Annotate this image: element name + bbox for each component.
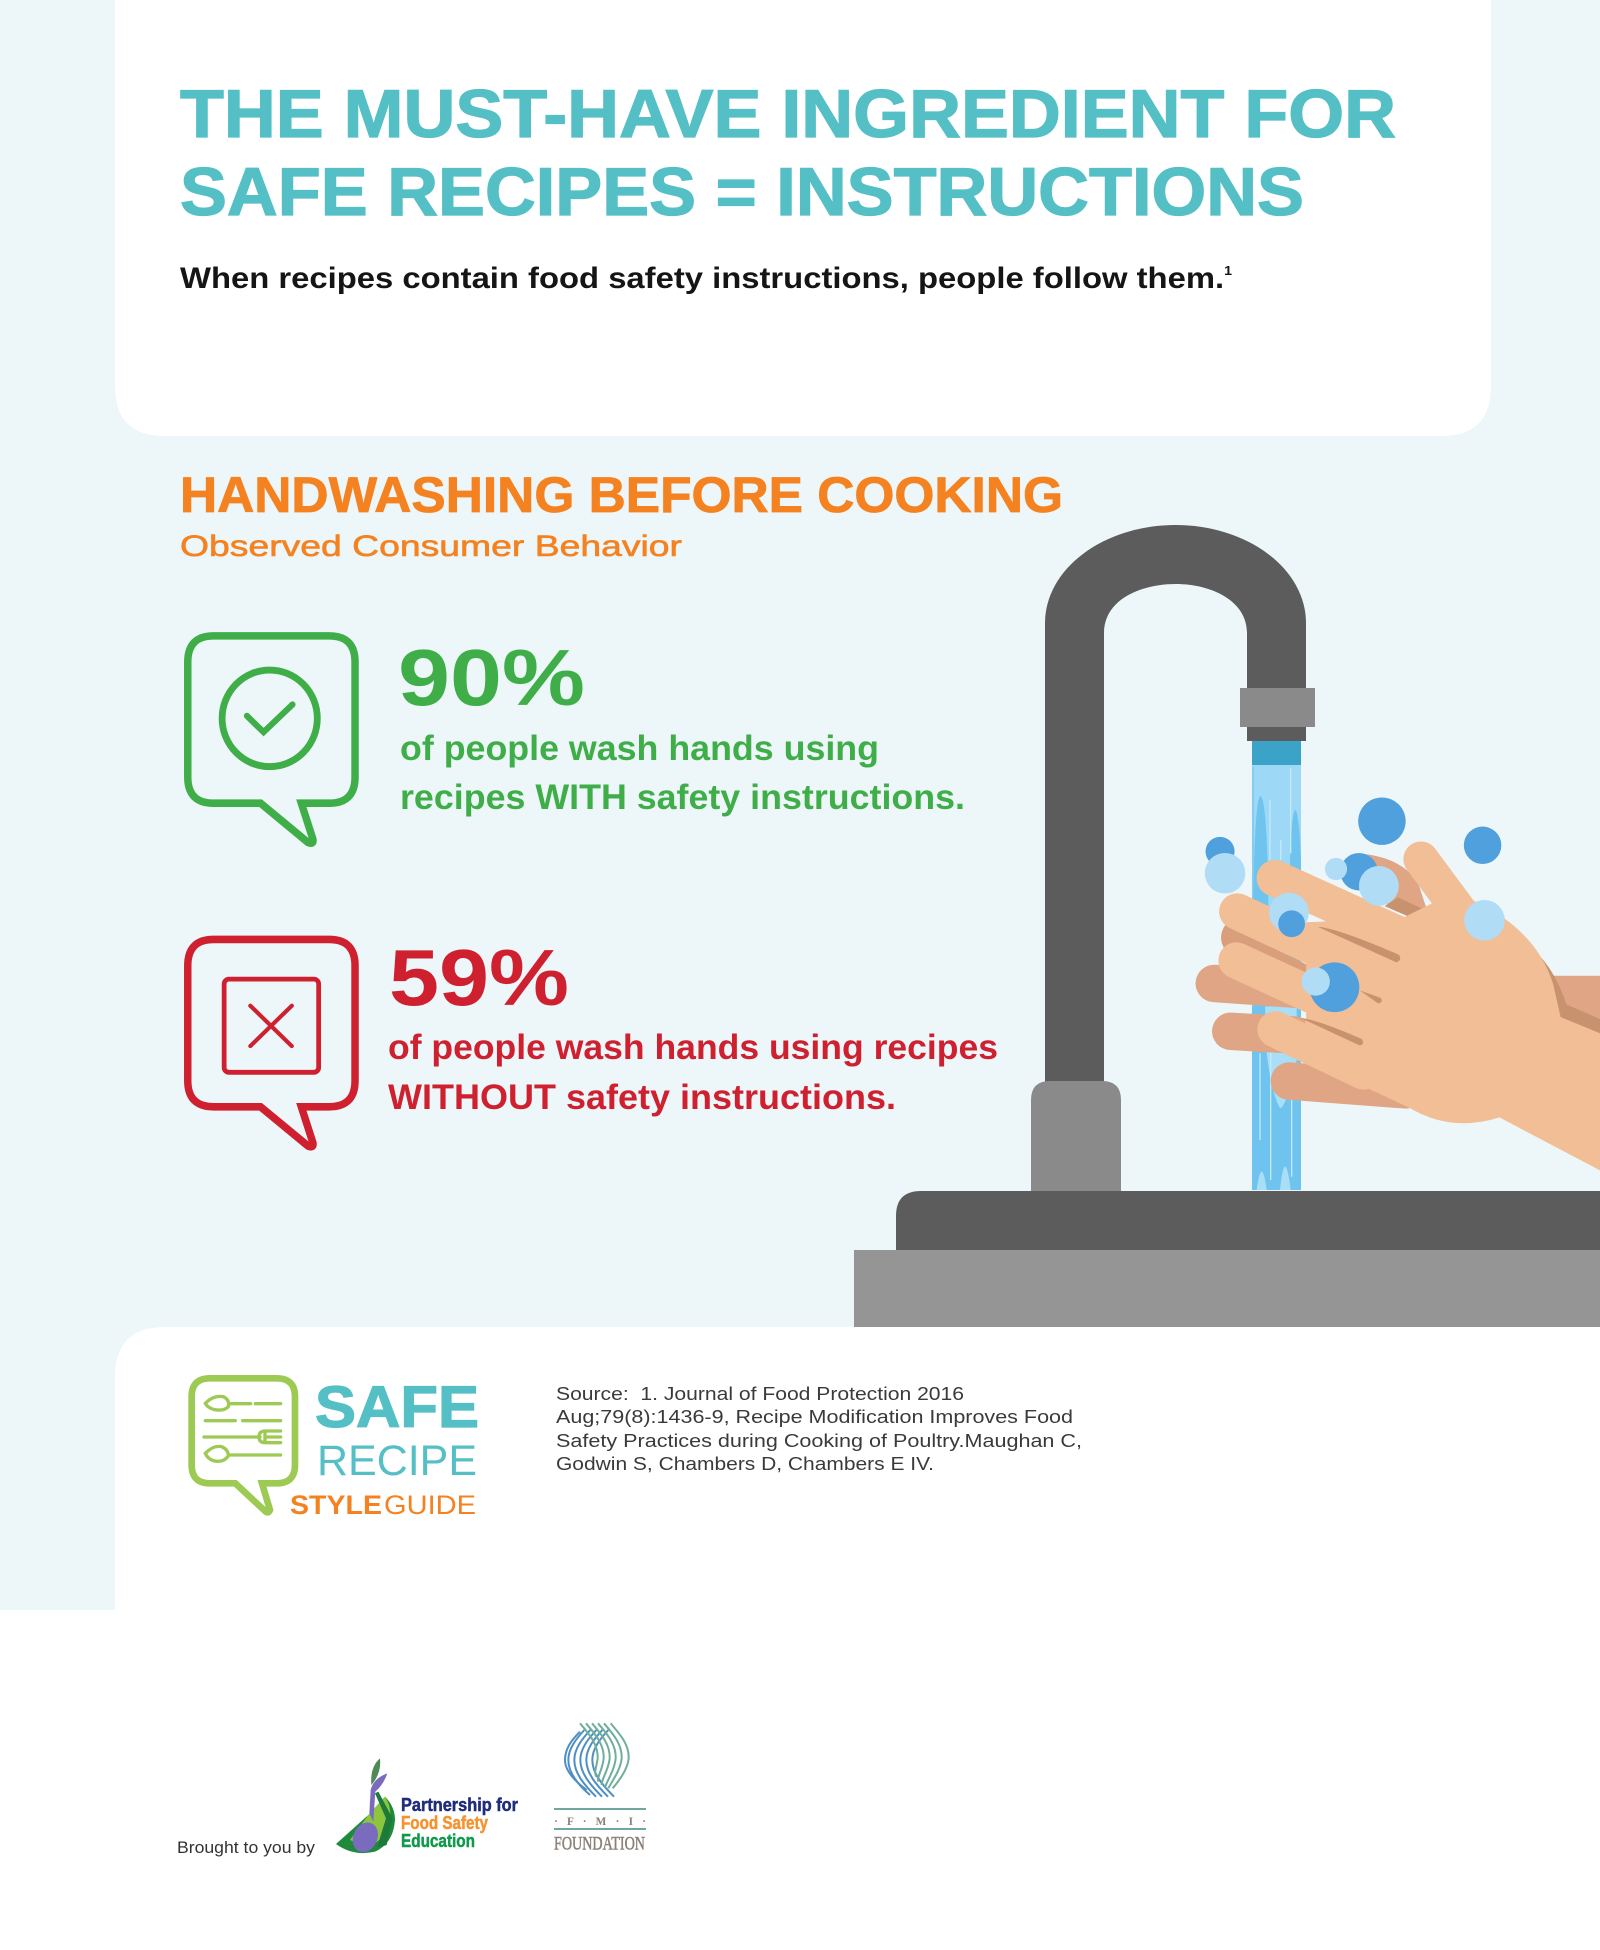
source citation: Aug;79(8):1436-9, Recipe Modification Improves Food: [556, 1407, 1073, 1427]
stat: 59 percent: [388, 933, 998, 1117]
back hand: [1214, 854, 1600, 1090]
logo: safe recipe style guide: GUIDE: [384, 1490, 476, 1520]
logo wordmark: Partnership for: [401, 1794, 518, 1815]
stat description: with instructions: of people wash hands using: [400, 729, 879, 768]
subtitle: 1: [1224, 263, 1232, 278]
title: [180, 76, 1396, 230]
stat: 59 percent: 59%: [389, 933, 569, 1022]
brought to you by: Brought to you by: [177, 1839, 316, 1857]
stat description: without instructions: WITHOUT safety instructions.: [388, 1078, 896, 1117]
logo wordmark: Education: [401, 1830, 475, 1851]
stat description: without instructions: of people wash hands using recipes: [388, 1028, 998, 1067]
illustration: washing hands: [1205, 797, 1600, 1173]
panel: footer: [115, 1327, 1600, 1610]
icon: red speech bubble with cross: [188, 939, 355, 1147]
logo: safe recipe style guide: STYLE: [290, 1490, 382, 1520]
logo wordmark: · F · M · I ·: [554, 1816, 646, 1828]
stat: 90 percent: [398, 633, 965, 817]
section heading: HANDWASHING BEFORE COOKING: [180, 467, 1063, 523]
source citation: Source: 1. Journal of Food Protection 2016: [556, 1384, 964, 1404]
faucet base: [1031, 1081, 1121, 1192]
faucet neck: [1045, 525, 1306, 1090]
stat description: without instructions: [388, 1028, 998, 1117]
title: SAFE RECIPES = INSTRUCTIONS: [180, 154, 1304, 230]
source citation: Safety Practices during Cooking of Poultry.Maughan C,: [556, 1431, 1082, 1451]
subtitle: When recipes contain food safety instructions, people follow them.: [180, 262, 1135, 295]
logo: safe recipe style guide: SAFE: [315, 1375, 479, 1440]
illustration: faucet and sink: [854, 525, 1600, 1327]
logo wordmark: FOUNDATION: [554, 1833, 645, 1854]
logo: safe recipe style guide: RECIPE: [317, 1437, 477, 1485]
stat description: with instructions: recipes WITH safety instructions.: [400, 778, 965, 817]
bubbles behind hands: [1205, 797, 1501, 894]
logo: fmi foundation: [554, 1723, 646, 1854]
title: THE MUST-HAVE INGREDIENT FOR: [180, 76, 1396, 152]
logo wordmark: Food Safety: [401, 1812, 489, 1833]
sink counter: [896, 1191, 1600, 1250]
icon: green speech bubble with check: [188, 636, 355, 843]
section heading: [180, 467, 1063, 563]
finger shadows: [1300, 927, 1400, 1045]
faucet nozzle: [1240, 688, 1315, 765]
logo mark: [336, 1758, 395, 1856]
source citation: Godwin S, Chambers D, Chambers E IV.: [556, 1454, 934, 1474]
section subheading: Observed Consumer Behavior: [180, 530, 682, 563]
logo: partnership for food safety education: [336, 1758, 518, 1856]
water stream: [1252, 765, 1301, 1190]
logo wordmark: [401, 1794, 518, 1851]
logo wordmark: [554, 1808, 646, 1854]
logo: safe recipe style guide: [192, 1375, 479, 1520]
panel: header: [115, 0, 1491, 436]
sink ledge: [854, 1250, 1600, 1327]
front hand: [1237, 859, 1600, 1173]
bubbles over hands: [1269, 866, 1505, 1012]
stat description: with instructions: [400, 729, 965, 817]
logo mark: waves: [565, 1723, 629, 1797]
stat: 90 percent: 90%: [398, 633, 585, 722]
source citation: [556, 1384, 1082, 1474]
icon: recipe speech bubble: [192, 1378, 295, 1512]
